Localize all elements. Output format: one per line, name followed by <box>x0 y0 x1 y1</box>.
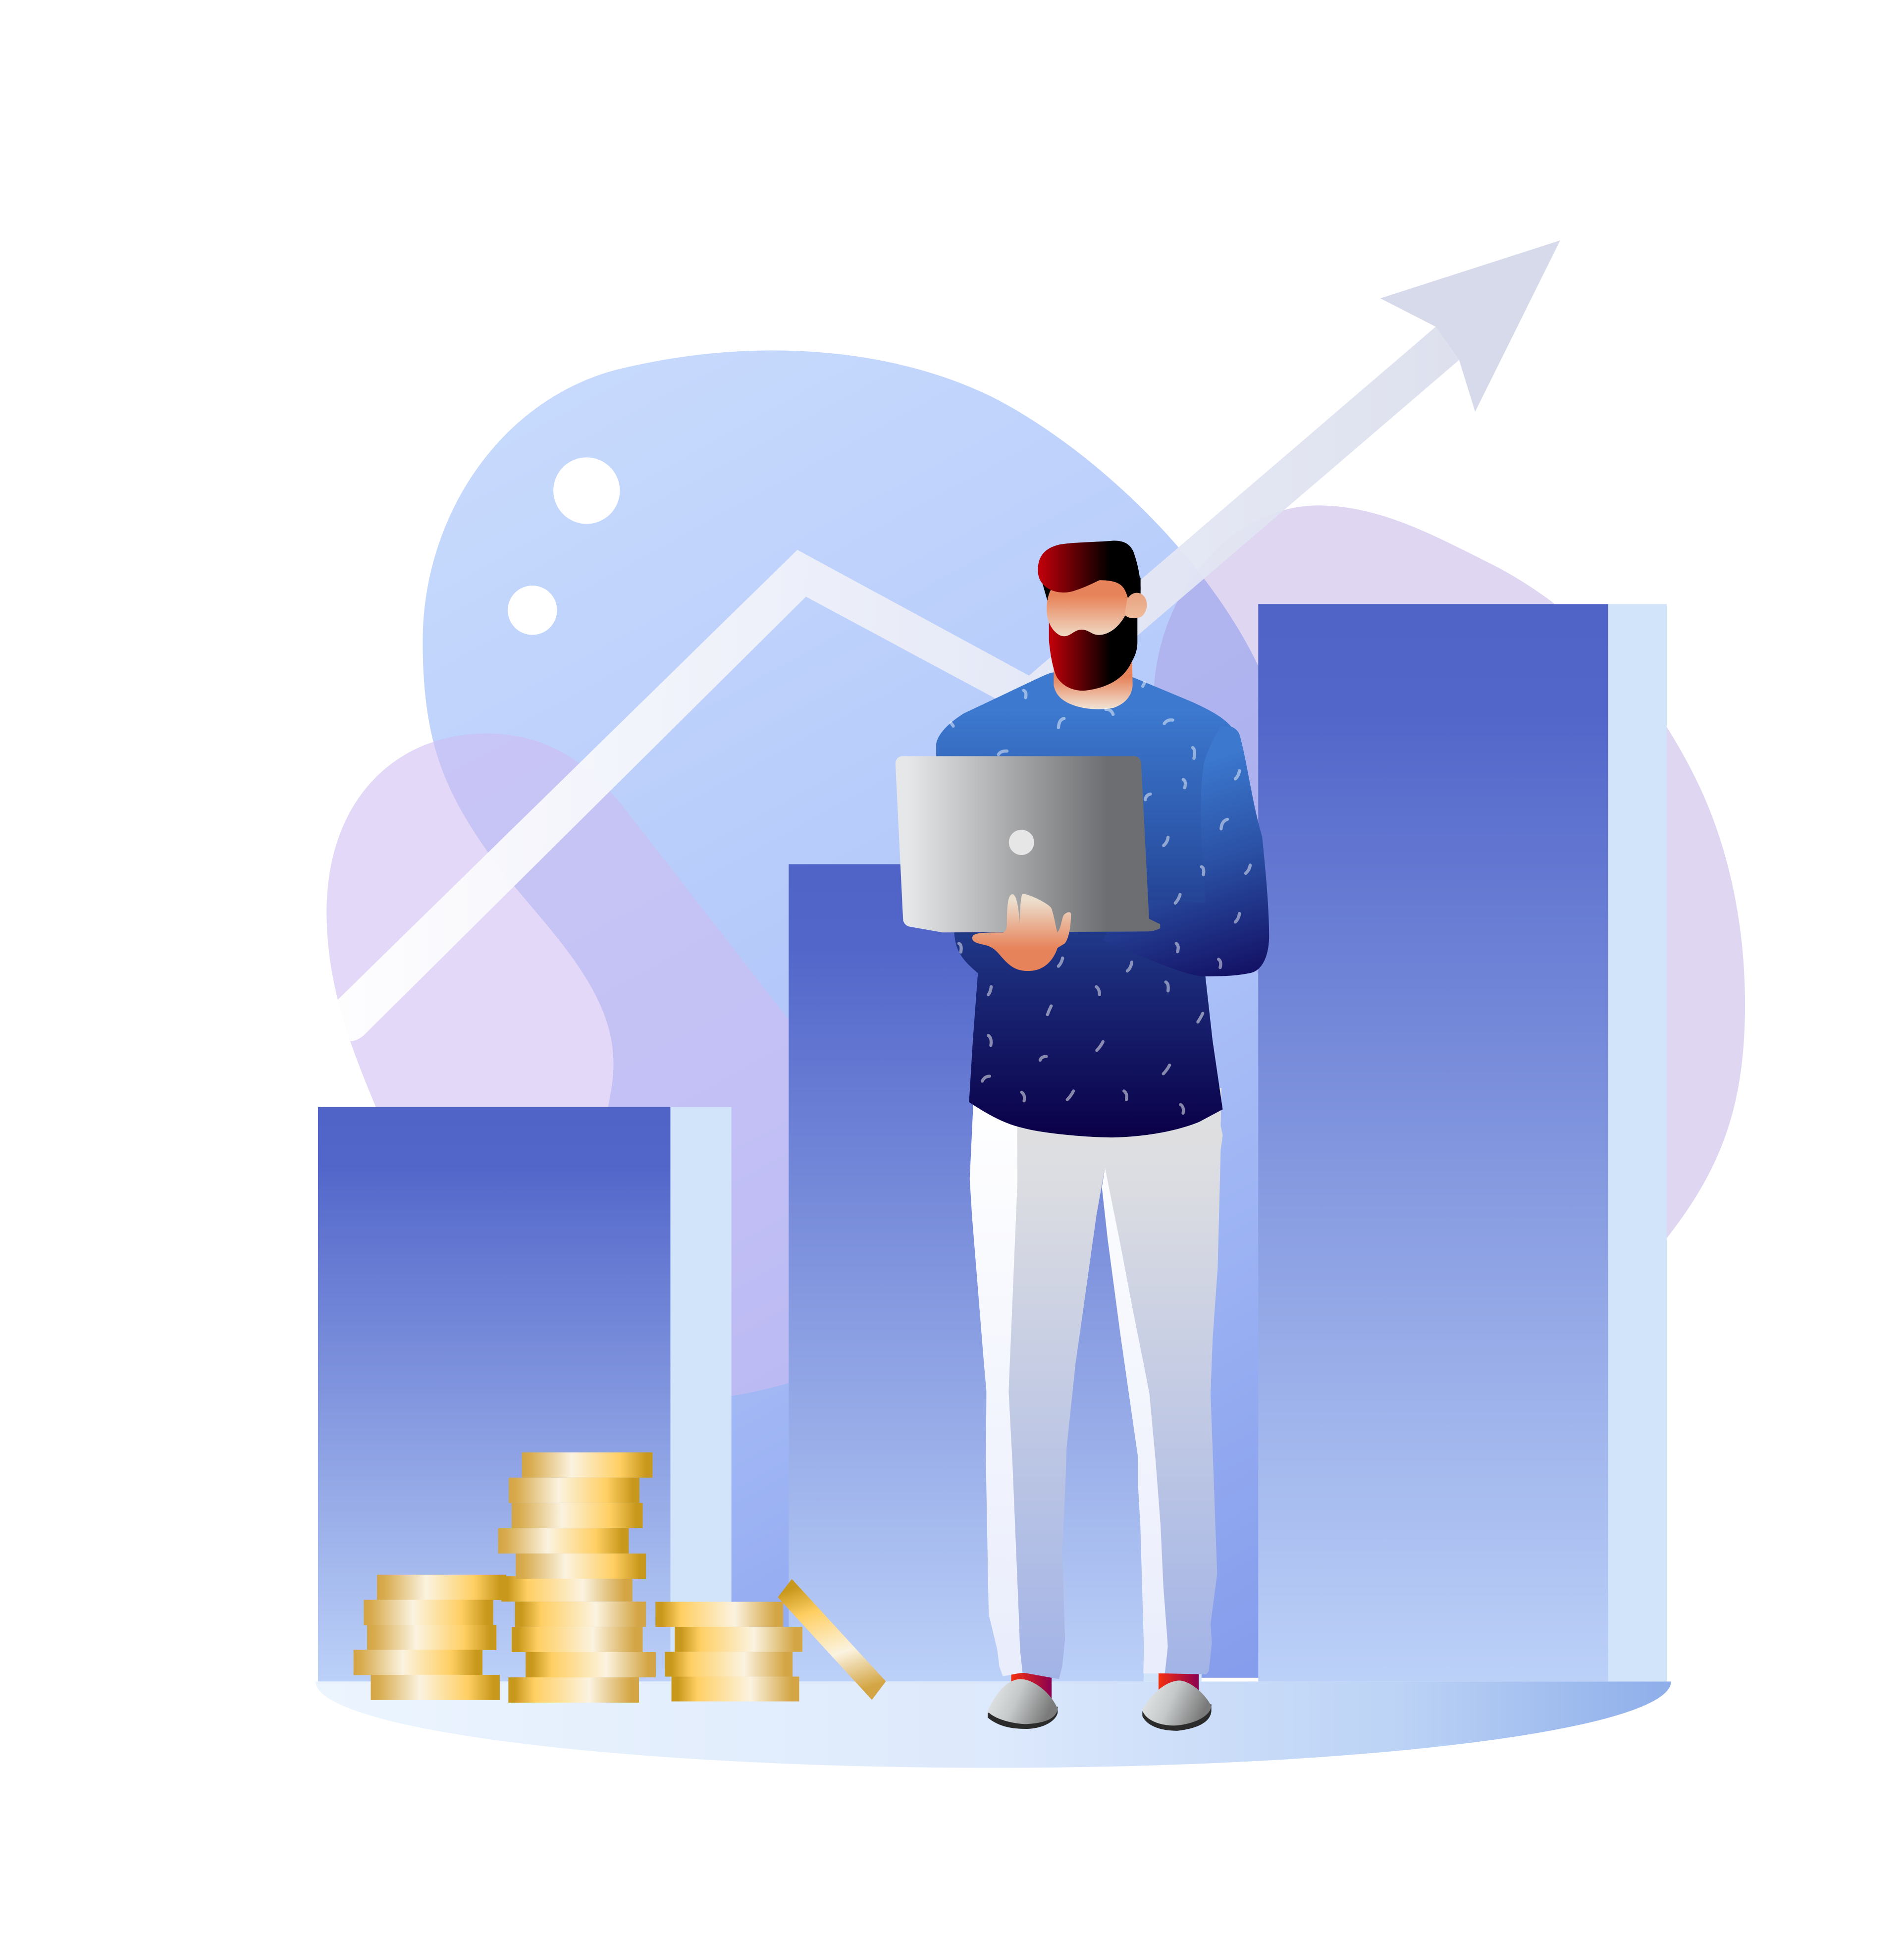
bar 1 <box>318 1107 732 1681</box>
sweater pattern upper <box>951 683 1250 995</box>
upper body <box>896 540 1269 1137</box>
ear <box>1125 592 1147 618</box>
man with laptop <box>896 540 1269 1731</box>
laptop <box>896 756 1160 932</box>
right coin stack <box>655 1602 802 1701</box>
tilted coin <box>778 1579 886 1700</box>
decorative white circles <box>508 457 620 635</box>
legs and shoes <box>970 1088 1223 1731</box>
arrow shaft <box>336 326 1459 1041</box>
left coin stack <box>354 1575 506 1700</box>
bar 2 <box>789 864 1202 1681</box>
large blue blob <box>423 350 1296 1678</box>
face <box>1047 580 1128 636</box>
trousers light side <box>970 1088 1169 1676</box>
shoe right <box>1142 1680 1212 1731</box>
trousers shaded side <box>1008 1088 1223 1679</box>
sweater arm <box>1103 726 1269 976</box>
neck <box>1054 660 1133 709</box>
bar base highlight <box>1202 1678 1258 1681</box>
coin stacks <box>354 1452 886 1703</box>
sweater body <box>936 672 1237 1137</box>
sock right <box>1159 1672 1199 1700</box>
sweater pattern lower <box>982 1006 1203 1113</box>
floor ellipse <box>316 1681 1671 1768</box>
shoe left <box>988 1679 1058 1729</box>
hair front <box>1038 540 1141 598</box>
purple blob right <box>1154 505 1745 1239</box>
bar 3 <box>1258 604 1667 1681</box>
arrow head <box>1380 240 1560 412</box>
beard <box>1049 614 1137 691</box>
purple blob left <box>326 734 801 1399</box>
middle coin stack <box>498 1452 656 1703</box>
rising arrow <box>336 240 1560 1041</box>
sock left <box>1011 1673 1052 1700</box>
bar chart <box>318 604 1667 1681</box>
hand <box>972 894 1071 971</box>
laptop logo <box>1009 830 1034 855</box>
hair back <box>1042 578 1141 603</box>
